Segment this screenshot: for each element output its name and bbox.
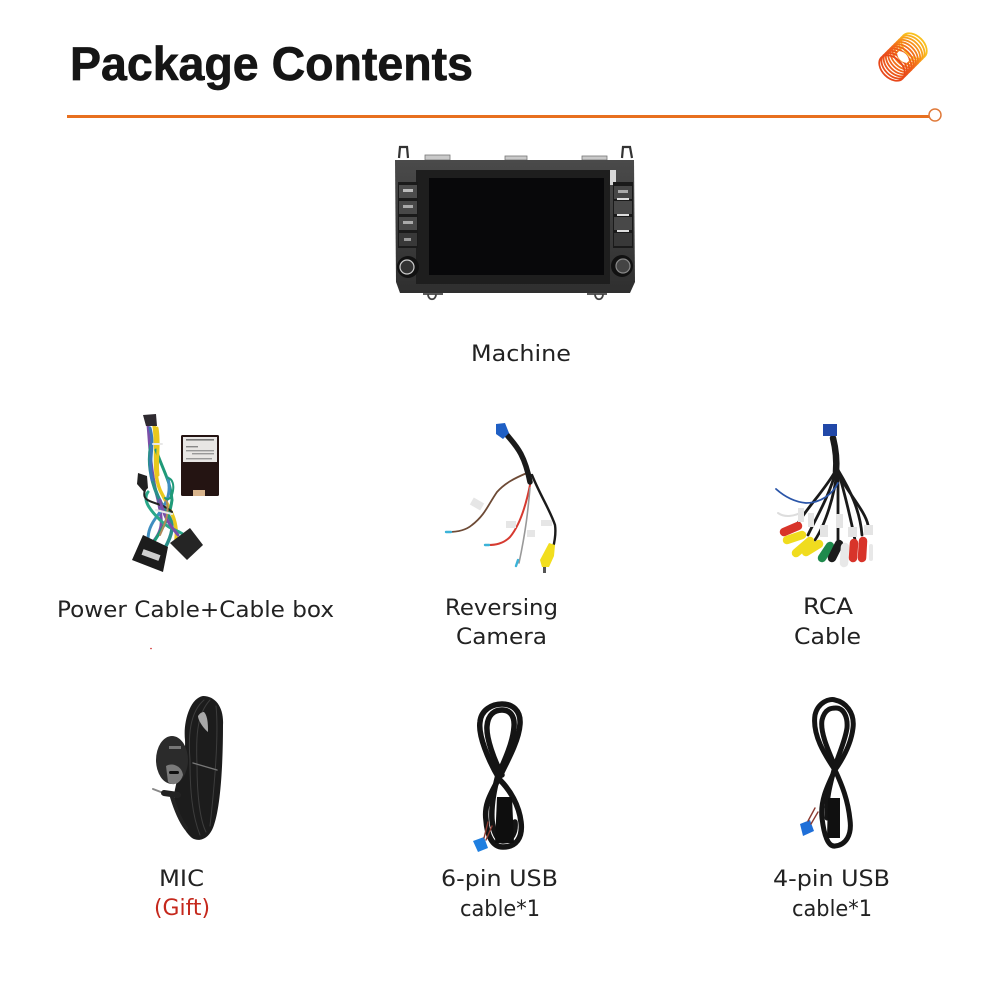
connector body — [827, 798, 840, 838]
label: 4-pin USB cable — [773, 866, 890, 922]
white edge — [610, 170, 616, 185]
top connector — [143, 414, 157, 426]
tags — [470, 498, 552, 537]
red wire — [488, 485, 530, 545]
label: RCA cable: Cable — [794, 624, 861, 650]
item: reversing camera cable — [446, 423, 555, 573]
label: reversing camera — [445, 595, 558, 650]
screen — [429, 178, 604, 275]
bottom clips — [423, 294, 607, 299]
yellow RCA plug — [540, 543, 555, 573]
label: power cable and cable box: Power Cable+Cable box — [57, 597, 334, 623]
item: power cable harness — [132, 414, 219, 572]
item: RCA cable — [776, 424, 873, 563]
right buttons — [613, 182, 633, 248]
item: 4-pin USB cable — [800, 700, 853, 846]
label: 6-pin USB cable: 6-pin USB — [441, 866, 558, 892]
fanned wires — [797, 470, 868, 545]
cable tie — [193, 763, 217, 770]
plug and wire — [153, 789, 186, 828]
icon: orange coil logo — [874, 28, 932, 86]
label: MIC gift: MIC — [159, 866, 204, 892]
brown wire — [448, 473, 527, 532]
blue connector — [496, 423, 509, 439]
blue connector — [823, 424, 837, 436]
main trunk — [507, 435, 530, 482]
plugs — [784, 526, 871, 563]
label: machine: Machine — [471, 341, 571, 367]
label: RCA cable — [794, 594, 861, 650]
blue connector — [800, 820, 814, 836]
coloured wires — [808, 808, 818, 824]
grey wire — [519, 488, 530, 563]
cable box — [181, 435, 219, 496]
top mounting brackets — [399, 147, 632, 158]
small black connector — [137, 473, 148, 492]
item: microphone — [153, 696, 223, 840]
connector body — [495, 797, 514, 843]
blue wire — [776, 483, 838, 503]
label: MIC gift — [154, 866, 210, 921]
label: reversing camera: Camera — [456, 624, 547, 650]
coiled cable — [174, 696, 223, 840]
decorative red speck — [150, 648, 152, 649]
label: 6-pin USB cable: cable*1 — [460, 896, 540, 922]
tags — [798, 508, 873, 537]
body — [395, 160, 635, 293]
coloured wires — [484, 822, 492, 840]
left buttons — [398, 182, 418, 248]
label: RCA cable: RCA — [803, 594, 854, 620]
label: 4-pin USB cable: cable*1 — [792, 896, 872, 922]
black wire — [532, 475, 555, 548]
left black block — [132, 535, 168, 572]
bezel — [416, 170, 610, 284]
label: reversing camera: Reversing — [445, 595, 558, 621]
trunk — [833, 438, 836, 472]
top tabs — [425, 155, 607, 160]
cable loops — [815, 700, 853, 846]
item: 6-pin USB cable — [473, 704, 521, 852]
item: machine head unit — [395, 147, 635, 299]
wires — [144, 425, 186, 548]
mic head — [156, 736, 188, 784]
left knob — [397, 256, 419, 278]
label: 4-pin USB cable: 4-pin USB — [773, 866, 890, 892]
wire tips — [446, 532, 518, 566]
right black block — [170, 528, 203, 560]
cable loops — [480, 704, 521, 847]
white wire — [778, 512, 802, 516]
blue connector — [473, 837, 488, 852]
title: Package Contents — [70, 37, 473, 90]
label: MIC gift: (Gift) — [154, 895, 210, 921]
header rule with end circle — [67, 109, 941, 121]
label: 6-pin USB cable — [441, 866, 558, 922]
right knob — [611, 255, 633, 277]
